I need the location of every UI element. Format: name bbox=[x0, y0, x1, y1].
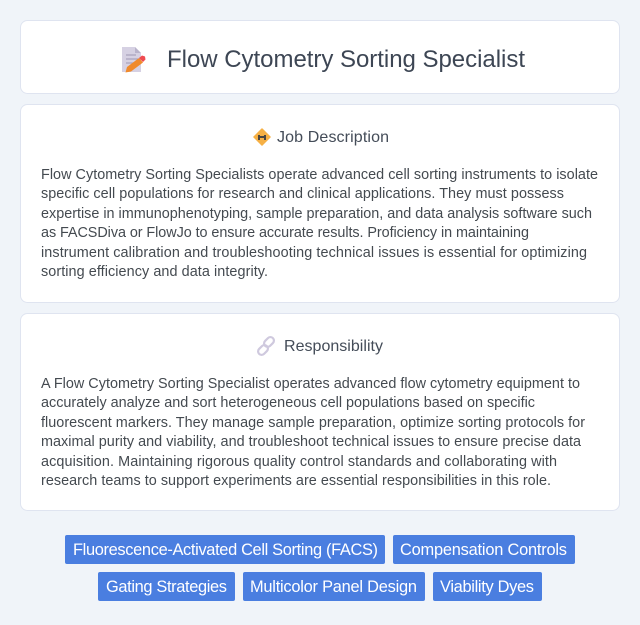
text block: job description: Flow Cytometry Sorting Specialists operate advanced cell sorting instruments to isolate bbox=[41, 167, 598, 183]
tag: compensation controls: Compensation Controls bbox=[400, 541, 567, 559]
text block: responsibility: research teams to support experiments are essential responsibilities in this role. bbox=[41, 473, 551, 489]
tag group bbox=[65, 535, 575, 601]
tag: viability dyes bbox=[433, 572, 542, 601]
text block: responsibility bbox=[41, 376, 585, 489]
tag: FACS: Fluorescence-Activated Cell Sorting (FACS) bbox=[73, 541, 378, 559]
text block: job description bbox=[41, 167, 598, 280]
panel: responsibility bbox=[20, 314, 620, 510]
text block: responsibility: A Flow Cytometry Sorting Specialist operates advanced flow cytometry equipment to bbox=[41, 376, 580, 392]
heading: job description: Job Description bbox=[277, 129, 389, 146]
tag: multicolor panel design: Multicolor Panel Design bbox=[250, 578, 417, 596]
tag: gating strategies bbox=[98, 572, 235, 601]
text block: responsibility: fluorescent markers. They manage sample preparation, optimize sorting protocols for bbox=[41, 415, 585, 431]
tag: viability dyes: Viability Dyes bbox=[440, 578, 534, 596]
text block: job description: sorting efficiency and data integrity. bbox=[41, 264, 268, 280]
text block: responsibility: accurately analyze and sort heterogeneous cell populations based on specific bbox=[41, 395, 535, 411]
icon: document with pencil bbox=[122, 47, 146, 72]
text block: job description: instrument calibration and troubleshooting technical issues is essential for optimizing bbox=[41, 245, 587, 261]
text block: job description: specific cell populations for research and clinical applications. They must possess bbox=[41, 186, 564, 202]
tag: gating strategies: Gating Strategies bbox=[106, 578, 227, 596]
text block: responsibility: maximal purity and viability, and troubleshoot technical issues to ensure precise data bbox=[41, 434, 581, 450]
title: Flow Cytometry Sorting Specialist bbox=[167, 46, 525, 73]
panel: job description bbox=[20, 104, 620, 302]
tag: compensation controls bbox=[393, 535, 575, 564]
panel: title card bbox=[20, 20, 620, 94]
heading: responsibility: Responsibility bbox=[284, 338, 383, 355]
text block: responsibility: acquisition. Maintaining rigorous quality control standards and collaborating with bbox=[41, 454, 557, 470]
icon: link bbox=[257, 336, 275, 356]
tag: FACS bbox=[65, 535, 385, 564]
text block: job description: as FACSDiva or FlowJo to ensure accurate results. Proficiency in maintaining bbox=[41, 225, 529, 241]
tag: multicolor panel design bbox=[243, 572, 425, 601]
icon: orange diamond bbox=[254, 129, 270, 145]
text block: job description: expertise in immunophenotyping, sample preparation, and data analysis software such bbox=[41, 206, 592, 222]
